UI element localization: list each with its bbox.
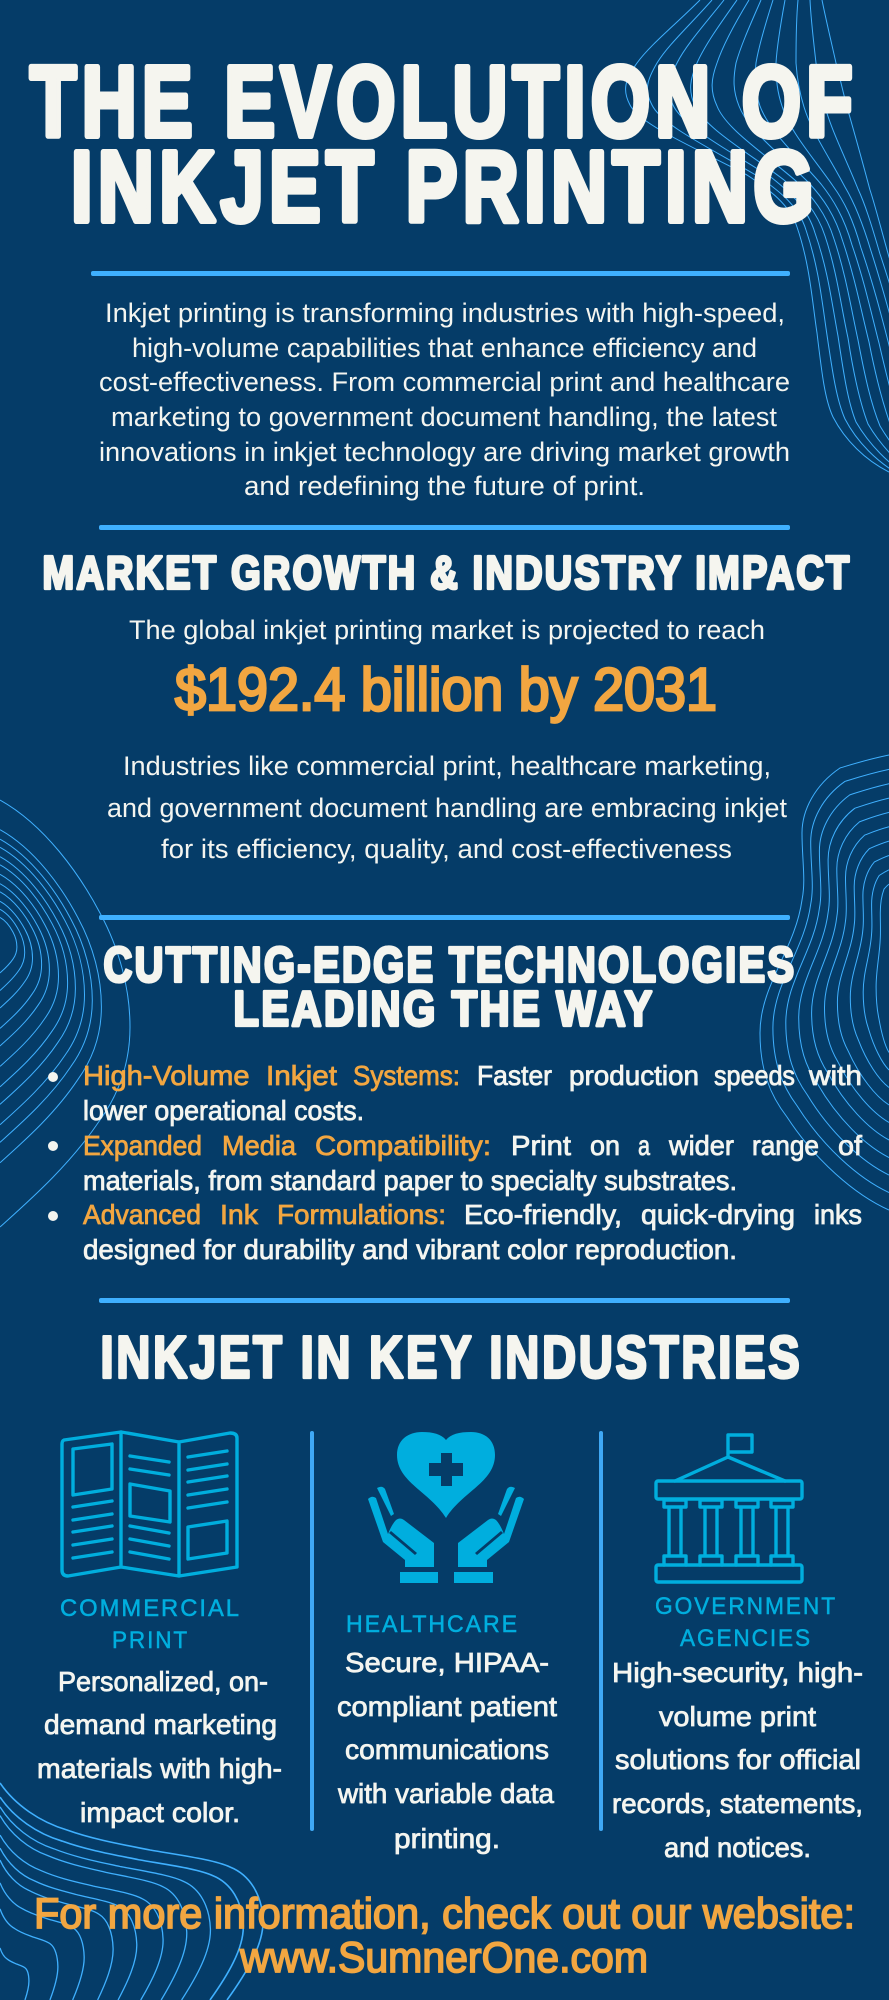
- bullet: high-volume systems: Faster: [477, 1060, 552, 1091]
- market adoption paragraph: Industries like commercial print, healthcare marketing,: [123, 751, 771, 781]
- bullet: expanded media: of: [838, 1130, 862, 1161]
- description: government agencies: volume print: [659, 1701, 816, 1732]
- description: healthcare: [337, 1647, 557, 1854]
- title: [30, 46, 858, 243]
- divider under intro: [99, 525, 790, 530]
- bullet: high-volume systems: High-Volume: [83, 1060, 250, 1091]
- bullet: expanded media: wider: [668, 1130, 734, 1161]
- intro paragraph: and redefining the future of print.: [244, 471, 645, 501]
- market adoption paragraph: for its efficiency, quality, and cost-effectiveness: [161, 834, 732, 864]
- bullet: ink formulations: designed for durability and vibrant color reproduction.: [83, 1234, 737, 1265]
- intro paragraph: marketing to government document handling, the latest: [111, 402, 778, 432]
- bullet: expanded media: on: [590, 1130, 620, 1161]
- heading: technologies: LEADING THE WAY: [234, 982, 654, 1036]
- bullet: high-volume systems: [48, 1060, 862, 1126]
- label: government agencies: [655, 1593, 837, 1652]
- label: commercial print: [60, 1595, 241, 1654]
- description: commercial print: demand marketing: [44, 1709, 277, 1740]
- bullet: expanded media: Media: [222, 1130, 296, 1161]
- decorative wave lines: right middle: [760, 755, 889, 1210]
- label: government agencies: AGENCIES: [680, 1625, 812, 1652]
- bullet: ink formulations: quick-drying: [641, 1199, 795, 1230]
- bullet: high-volume systems: Systems:: [353, 1060, 460, 1091]
- label: commercial print: PRINT: [112, 1627, 189, 1654]
- divider under title: [91, 271, 790, 276]
- label: healthcare: HEALTHCARE: [346, 1611, 519, 1638]
- description: healthcare: communications: [345, 1734, 549, 1765]
- description: commercial print: [37, 1666, 282, 1828]
- decorative wave lines: bottom left: [0, 1783, 263, 2000]
- panel: commercial print: [37, 1432, 282, 1828]
- market projection sentence: The global inkjet printing market is projected to reach: [129, 615, 765, 645]
- description: healthcare: Secure, HIPAA-: [345, 1647, 549, 1678]
- bullet: high-volume systems: Inkjet: [266, 1060, 337, 1091]
- description: government agencies: solutions for official: [615, 1744, 861, 1775]
- bullet: high-volume systems: with: [808, 1060, 862, 1091]
- icon: brochure: [62, 1432, 237, 1576]
- bullet: expanded media: Expanded: [83, 1130, 202, 1161]
- description: commercial print: Personalized, on-: [58, 1666, 268, 1697]
- bullet: ink formulations: Advanced: [83, 1199, 201, 1230]
- description: healthcare: compliant patient: [337, 1691, 557, 1722]
- bullet: ink formulations: inks: [814, 1199, 862, 1230]
- bullet: ink formulations: [48, 1199, 862, 1265]
- bullet: expanded media: Compatibility:: [315, 1130, 491, 1161]
- decorative wave lines: left middle: [0, 800, 130, 1227]
- footer call to action: [34, 1890, 855, 1982]
- label: government agencies: GOVERNMENT: [655, 1593, 837, 1620]
- intro paragraph: innovations in inkjet technology are driving market growth: [99, 437, 790, 467]
- decorative wave lines: top right: [626, 0, 889, 483]
- key figure: market size: $192.4 billion by 2031: [175, 656, 717, 723]
- description: government agencies: and notices.: [664, 1832, 811, 1863]
- divider above technologies: [99, 915, 790, 920]
- footer call to action: www.SumnerOne.com: [239, 1934, 648, 1982]
- bullet: ink formulations: Formulations:: [277, 1199, 446, 1230]
- description: government agencies: records, statements,: [612, 1788, 863, 1819]
- bullet: ink formulations: Ink: [220, 1199, 259, 1230]
- column divider 2: [599, 1431, 603, 1831]
- icon: government building: [656, 1435, 802, 1582]
- bullet: ink formulations: Eco-friendly,: [464, 1199, 622, 1230]
- bullet: expanded media: [48, 1130, 862, 1196]
- panel: government agencies: [612, 1435, 863, 1863]
- footer call to action: For more information, check out our website:: [34, 1890, 855, 1938]
- bullet: high-volume systems: speeds: [714, 1060, 795, 1091]
- technology bullet list: [48, 1060, 862, 1265]
- bullet: expanded media: a: [638, 1130, 650, 1161]
- description: healthcare: with variable data: [337, 1778, 554, 1809]
- bullet: high-volume systems: production: [569, 1060, 699, 1091]
- column divider 1: [310, 1431, 314, 1831]
- intro paragraph: [99, 298, 790, 501]
- description: healthcare: printing.: [394, 1823, 500, 1854]
- icon: heart in hands: [368, 1432, 524, 1583]
- intro paragraph: Inkjet printing is transforming industries with high-speed,: [105, 298, 785, 328]
- description: government agencies: [612, 1657, 863, 1863]
- market adoption paragraph: and government document handling are embracing inkjet: [107, 793, 787, 823]
- panel: healthcare: [337, 1432, 557, 1854]
- divider above industries: [99, 1298, 790, 1303]
- bullet: high-volume systems: lower operational costs.: [83, 1095, 364, 1126]
- bullet: expanded media: range: [752, 1130, 819, 1161]
- intro paragraph: cost-effectiveness. From commercial print and healthcare: [99, 367, 790, 397]
- bullet: expanded media: materials, from standard paper to specialty substrates.: [83, 1165, 737, 1196]
- label: commercial print: COMMERCIAL: [60, 1595, 241, 1622]
- bullet: expanded media: Print: [511, 1130, 571, 1161]
- description: commercial print: impact color.: [80, 1797, 240, 1828]
- market adoption paragraph: [107, 751, 787, 864]
- description: government agencies: High-security, high-: [612, 1657, 863, 1688]
- intro paragraph: high-volume capabilities that enhance efficiency and: [132, 333, 757, 363]
- heading: technologies: [104, 938, 796, 1036]
- description: commercial print: materials with high-: [37, 1753, 282, 1784]
